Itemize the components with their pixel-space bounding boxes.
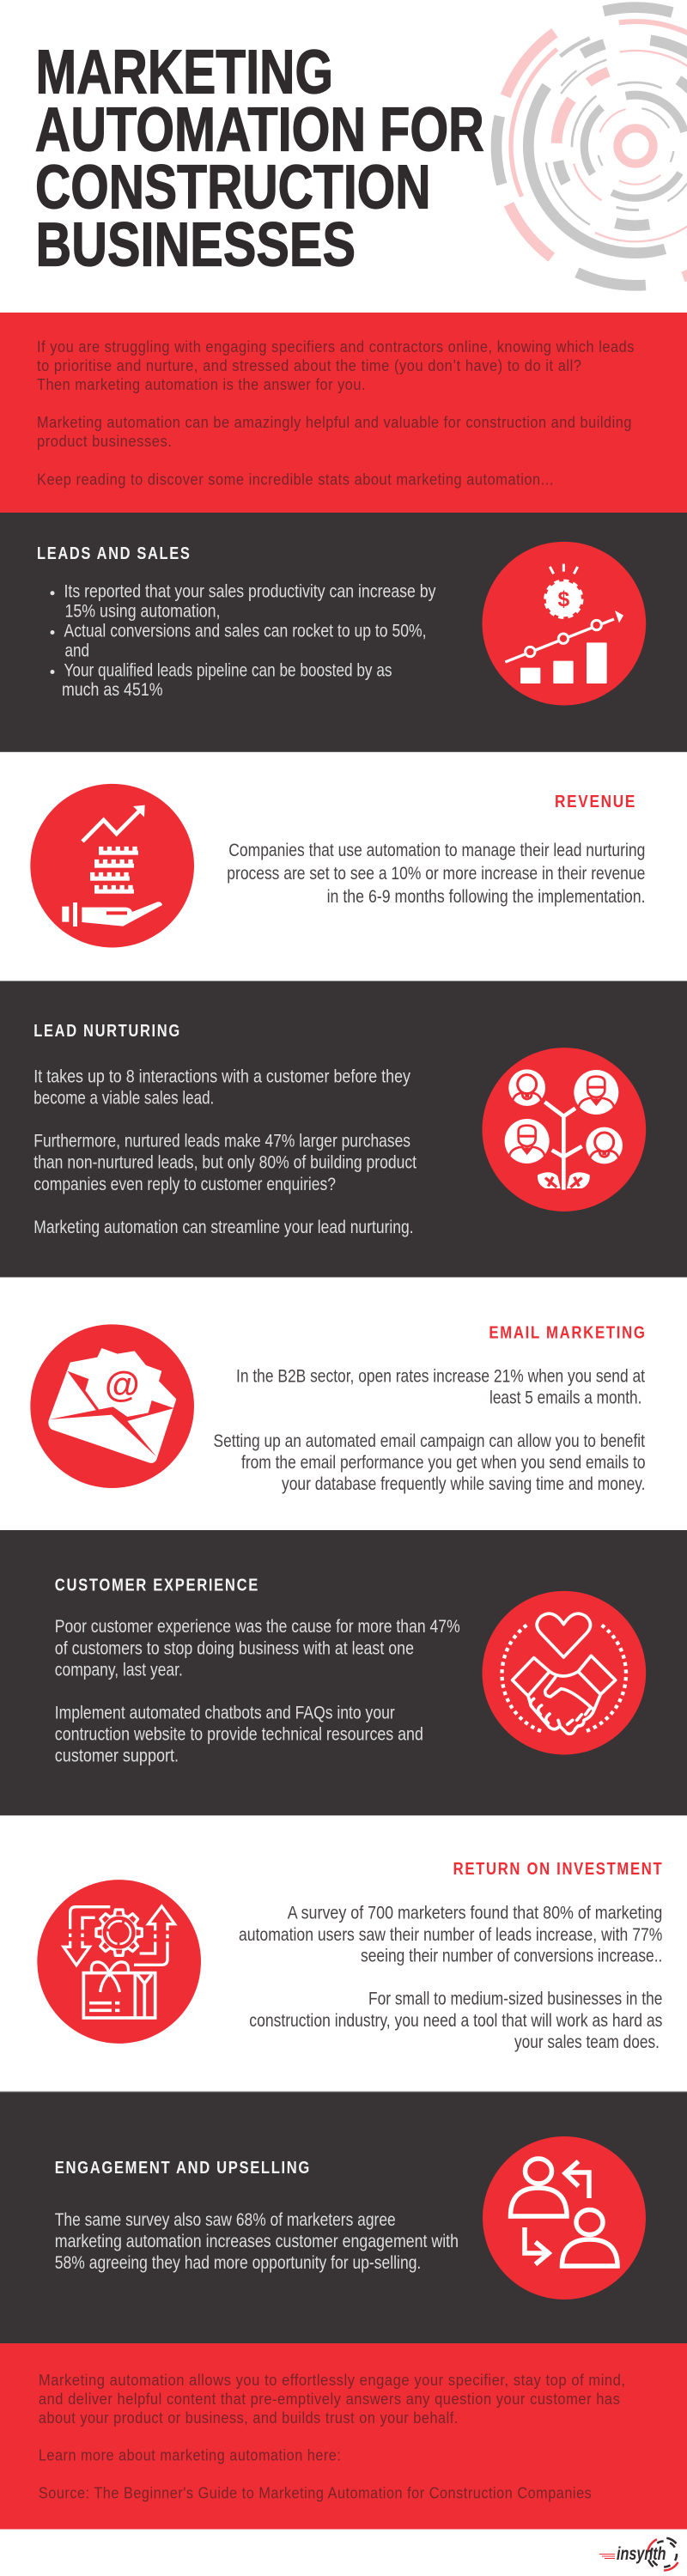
intro text block: Then marketing automation is the answer for you.: [37, 376, 366, 393]
icon: hand holding bricks with rising arrow: [30, 784, 194, 947]
title: BUSINESSES: [36, 210, 356, 280]
intro text block: Marketing automation can be amazingly helpful and valuable for construction and building: [37, 414, 632, 431]
icon: two people exchanging arrows: [483, 2136, 646, 2300]
lead nurturing text block: It takes up to 8 interactions with a customer before they: [33, 1067, 410, 1087]
conclusion text block: and deliver helpful content that pre-emptively answers any question your customer has: [39, 2391, 620, 2408]
heading: engagement and upselling: ENGAGEMENT AND UPSELLING: [55, 2159, 311, 2178]
customer experience text block: [55, 1617, 460, 1765]
panel: lead nurturing: [0, 981, 687, 1278]
title: AUTOMATION FOR: [35, 94, 484, 165]
return on investment text block: your sales team does.: [514, 2032, 660, 2052]
lead nurturing text block: Furthermore, nurtured leads make 47% larger purchases: [33, 1132, 410, 1151]
intro text block: If you are struggling with engaging specifiers and contractors online, knowing which leads: [37, 338, 635, 355]
lead nurturing text block: Marketing automation can streamline your lead nurturing.: [33, 1218, 414, 1237]
revenue text block: [227, 841, 646, 907]
title: CONSTRUCTION: [35, 153, 431, 222]
panel: revenue: [0, 752, 687, 981]
lead nurturing text block: become a viable sales lead.: [33, 1089, 214, 1109]
panel: introduction: [0, 313, 687, 513]
heading: email marketing: EMAIL MARKETING: [489, 1324, 647, 1343]
bullet list: Your qualified leads pipeline can be boosted by as: [64, 661, 392, 680]
icon: people on a growing plant: [482, 1048, 646, 1212]
panel: header: [0, 0, 687, 341]
bullet list: Its reported that your sales productivity can increase by: [64, 582, 436, 602]
panel: email marketing: [0, 1278, 687, 1530]
conclusion text block: Source: The Beginner's Guide to Marketing Automation for Construction Companies: [39, 2485, 592, 2502]
icon: dollar badge with growth chart: [482, 542, 646, 705]
engagement text block: 58% agreeing they had more opportunity for up-selling.: [55, 2253, 421, 2273]
conclusion text block: [39, 2372, 626, 2502]
panel: engagement and upselling: [0, 2092, 687, 2343]
intro text block: product businesses.: [37, 433, 172, 450]
title: MARKETING: [36, 38, 333, 106]
logo: insynth: insynth: [617, 2544, 666, 2564]
email text block: least 5 emails a month.: [489, 1388, 641, 1407]
title: [35, 38, 484, 280]
lead nurturing text block: than non-nurtured leads, but only 80% of building product: [33, 1153, 416, 1173]
email text block: [213, 1366, 646, 1494]
customer experience text block: customer support.: [55, 1747, 179, 1765]
heading: customer experience: CUSTOMER EXPERIENCE: [55, 1576, 259, 1595]
customer experience text block: company, last year.: [55, 1660, 183, 1680]
bullet list: Actual conversions and sales can rocket to up to 50%,: [64, 622, 426, 641]
conclusion text block: Marketing automation allows you to effortlessly engage your specifier, stay top of mind,: [39, 2372, 626, 2389]
intro text block: [37, 338, 635, 488]
panel: customer experience: [0, 1530, 687, 1816]
intro text block: Keep reading to discover some incredible stats about marketing automation...: [37, 471, 554, 488]
heading: revenue: REVENUE: [555, 793, 636, 811]
customer experience text block: Poor customer experience was the cause for more than 47%: [55, 1617, 460, 1637]
panel: conclusion: [0, 2343, 687, 2530]
intro text block: to prioritise and nurture, and stressed about the time (you don’t have) to do it all?: [37, 357, 582, 374]
bullet list: much as 451%: [62, 680, 163, 700]
bullet list: [50, 582, 436, 700]
icon: gear, arrows and gift box: [37, 1880, 201, 2044]
icon: open envelope with at sign: [30, 1324, 194, 1488]
customer experience text block: contruction website to provide technical resources and: [55, 1725, 423, 1745]
return on investment text block: [239, 1903, 662, 2052]
panel: leads and sales: [0, 513, 687, 752]
bullet list: and: [65, 641, 89, 661]
customer experience text block: of customers to stop doing business with at least one: [55, 1638, 414, 1658]
engagement text block: marketing automation increases customer engagement with: [55, 2232, 459, 2251]
bullet list: 15% using automation,: [65, 601, 220, 622]
icon: open envelope with at sign: @: [105, 1364, 140, 1405]
heading: leads and sales: LEADS AND SALES: [37, 544, 191, 563]
lead nurturing text block: companies even reply to customer enquiries?: [33, 1175, 336, 1194]
conclusion text block: about your product or business, and builds trust on your behalf.: [39, 2409, 459, 2427]
heading: lead nurturing: LEAD NURTURING: [33, 1022, 181, 1041]
logo: insynth: [599, 2531, 687, 2576]
icon: dollar badge with growth chart: $: [557, 588, 569, 611]
engagement text block: The same survey also saw 68% of marketers agree: [55, 2210, 396, 2230]
customer experience text block: Implement automated chatbots and FAQs into your: [55, 1703, 395, 1722]
lead nurturing text block: [33, 1067, 416, 1237]
engagement text block: [55, 2210, 459, 2273]
panel: return on investment: [0, 1815, 687, 2092]
decorative radial rings graphic: [491, 2, 687, 291]
icon: handshake with heart: [482, 1591, 646, 1754]
conclusion text block: Learn more about marketing automation here:: [39, 2447, 341, 2464]
